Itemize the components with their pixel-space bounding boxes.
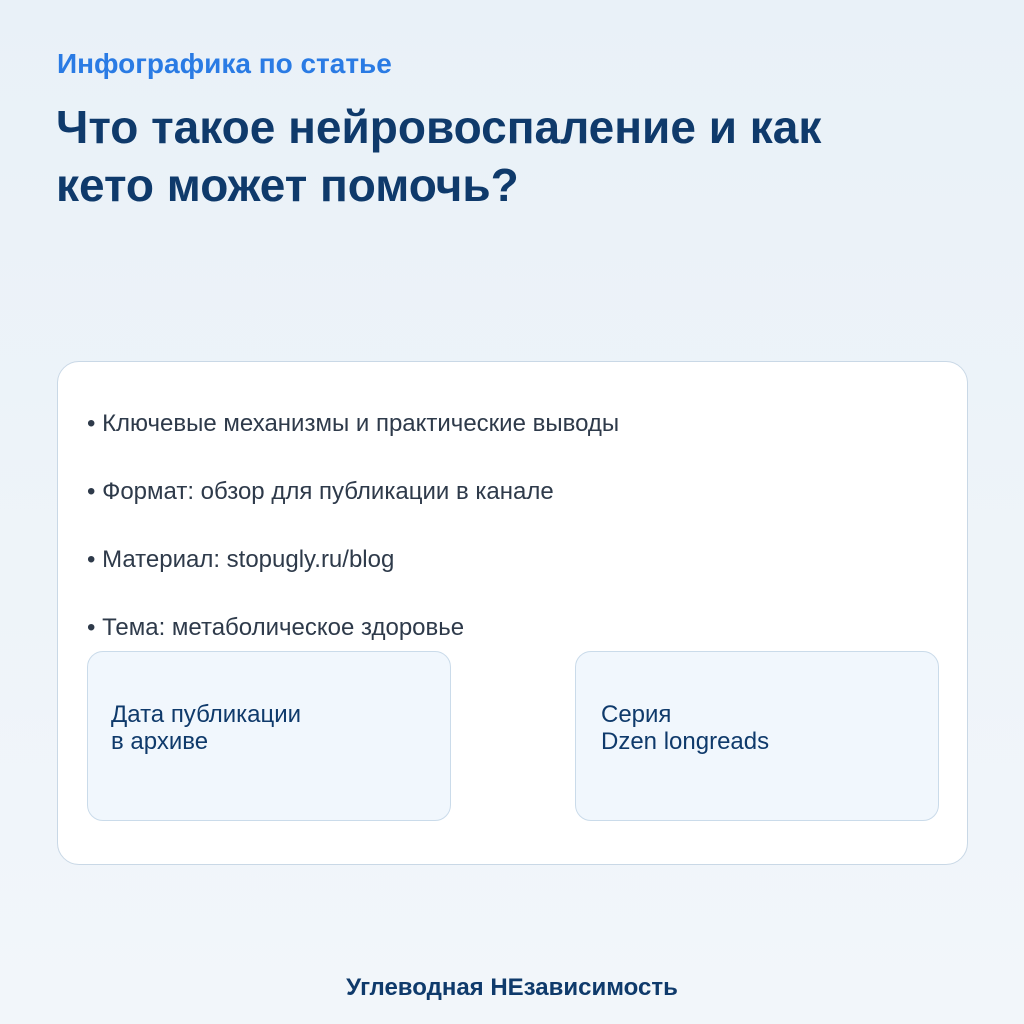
bullet list: [87, 410, 619, 641]
panel: main card: [57, 361, 968, 865]
bullet list: • Ключевые механизмы и практические выводы: [87, 410, 619, 437]
bullet list: • Тема: метаболическое здоровье: [87, 614, 464, 641]
bullet list: • Материал: stopugly.ru/blog: [87, 546, 394, 573]
title: Что такое нейровоспаление и как: [56, 101, 821, 153]
info box: series: [575, 651, 939, 821]
bullet list: • Формат: обзор для публикации в канале: [87, 478, 554, 505]
info box: series: Серия: [601, 701, 671, 728]
subtitle: Инфографика по статье: [57, 48, 392, 79]
info box: date: [87, 651, 451, 821]
title: [56, 101, 822, 211]
info box: series: Dzen longreads: [601, 728, 769, 755]
info box: date: в архиве: [111, 728, 208, 755]
info box: date: Дата публикации: [111, 701, 301, 728]
title: кето может помочь?: [56, 159, 519, 211]
footer: Углеводная НЕзависимость: [346, 974, 678, 1001]
